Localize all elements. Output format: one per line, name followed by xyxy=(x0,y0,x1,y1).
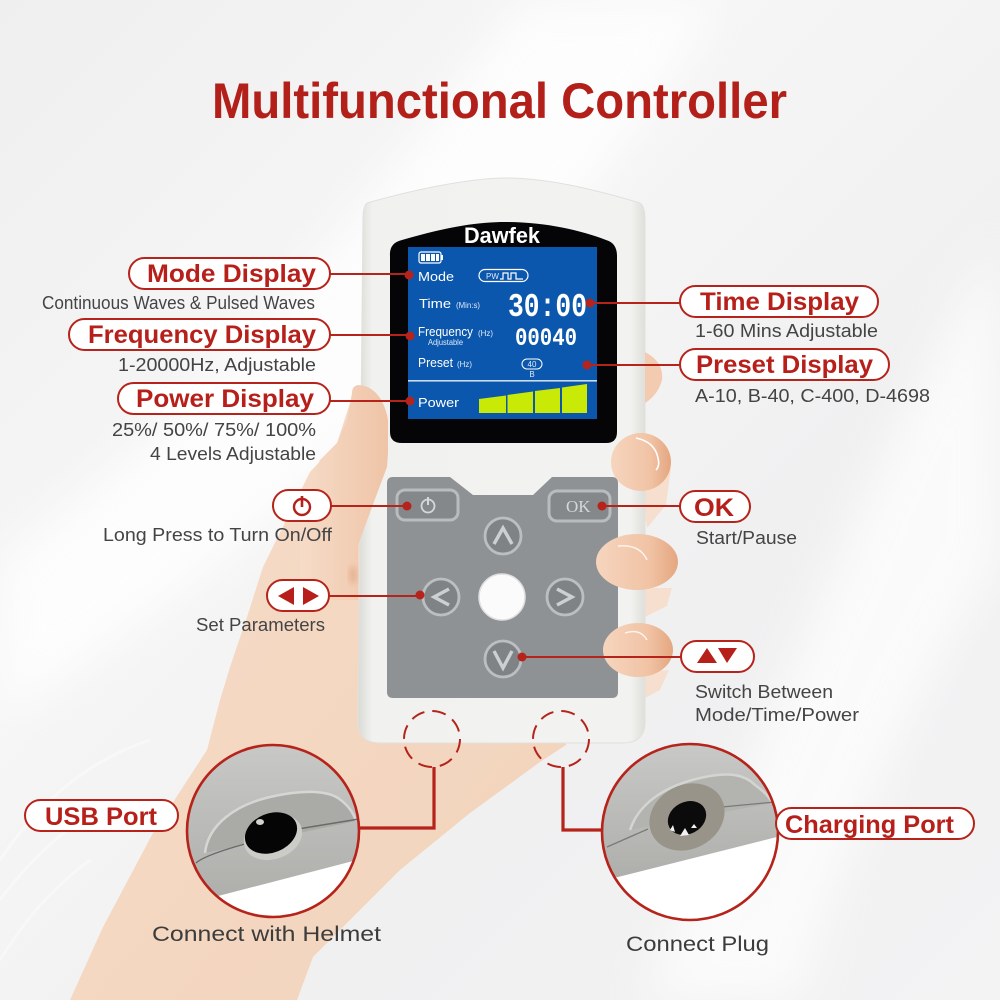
title: Multifunctional Controller xyxy=(212,73,787,129)
mode row: PW xyxy=(486,272,499,281)
text: power levels: 4 Levels Adjustable xyxy=(150,444,316,464)
label: left right arrows xyxy=(267,580,424,611)
power row: Power xyxy=(418,395,460,410)
left key xyxy=(423,579,459,615)
thumb xyxy=(300,385,388,600)
frequency row: Adjustable xyxy=(428,338,464,347)
frequency row: (Hz) xyxy=(478,329,493,338)
OK key: OK xyxy=(566,497,591,516)
controller device xyxy=(358,178,645,743)
text: switch description: Switch Between xyxy=(695,682,833,702)
preset row: 40 xyxy=(528,360,537,369)
connector: USB port xyxy=(360,767,434,828)
label: preset display: Preset Display xyxy=(696,351,873,379)
battery icon xyxy=(419,252,443,263)
center key xyxy=(479,574,525,620)
text: connect plug: Connect Plug xyxy=(626,933,769,956)
frequency row xyxy=(418,324,577,353)
power key xyxy=(397,490,458,520)
text: power button description: Long Press to Turn On/Off xyxy=(103,525,333,545)
power row xyxy=(418,384,587,413)
text: preset values: A-10, B-40, C-400, D-4698 xyxy=(695,386,930,406)
mode row: Mode xyxy=(418,269,454,284)
preset row: (Hz) xyxy=(457,360,472,369)
time row: 30:00 xyxy=(508,289,587,326)
LCD screen xyxy=(408,247,597,419)
label: power button xyxy=(273,490,412,521)
text: power levels xyxy=(112,420,316,464)
label: OK xyxy=(598,491,750,522)
charging port magnifier xyxy=(595,740,785,920)
finger backs behind device xyxy=(640,468,672,698)
screen bezel xyxy=(390,222,617,443)
preset row xyxy=(418,355,542,379)
preset row: B xyxy=(529,370,535,379)
label: preset display xyxy=(582,349,889,380)
label: USB port: USB Port xyxy=(45,803,158,831)
keypad panel xyxy=(387,477,618,698)
text: mode description: Continuous Waves & Pulsed Waves xyxy=(42,293,315,313)
down key xyxy=(485,641,521,677)
text: switch description xyxy=(695,682,859,725)
up key xyxy=(485,518,521,554)
hand and forearm xyxy=(70,400,566,1000)
USB port magnifier xyxy=(180,740,365,917)
text: power levels: 25%/ 50%/ 75%/ 100% xyxy=(112,420,316,440)
time row: (Min:s) xyxy=(456,301,480,310)
preset row: Preset xyxy=(418,355,453,370)
dashed marker: USB port xyxy=(404,711,460,767)
text: frequency description: 1-20000Hz, Adjustable xyxy=(118,355,316,375)
label: frequency display xyxy=(69,319,414,350)
text: set parameters: Set Parameters xyxy=(196,615,325,635)
connector: charging port xyxy=(563,767,602,830)
label: frequency display: Frequency Display xyxy=(88,321,316,349)
label: charging port: Charging Port xyxy=(785,811,955,839)
label: OK: OK xyxy=(694,494,734,522)
label: time display: Time Display xyxy=(700,288,859,316)
label: power display: Power Display xyxy=(136,385,314,413)
right fingers xyxy=(596,352,678,677)
label: mode display xyxy=(129,258,414,289)
OK key xyxy=(549,491,610,521)
time row xyxy=(419,289,587,326)
frequency row: 00040 xyxy=(515,324,577,353)
dashed marker: charging port xyxy=(533,711,589,767)
label: up down arrows xyxy=(518,641,754,672)
brand logo: Dawfek xyxy=(464,223,541,248)
text: time description: 1-60 Mins Adjustable xyxy=(695,321,878,341)
text: connect with helmet: Connect with Helmet xyxy=(152,923,381,946)
label: mode display: Mode Display xyxy=(147,260,316,288)
text: start pause: Start/Pause xyxy=(696,528,797,548)
right key xyxy=(547,579,583,615)
device body xyxy=(358,178,645,743)
label: USB port xyxy=(25,800,178,831)
text: switch description: Mode/Time/Power xyxy=(695,705,859,725)
time row: Time xyxy=(419,296,451,311)
frequency row: Frequency xyxy=(418,324,473,339)
label: time display xyxy=(586,286,878,317)
label: power display xyxy=(118,383,414,414)
mode row xyxy=(418,269,528,284)
